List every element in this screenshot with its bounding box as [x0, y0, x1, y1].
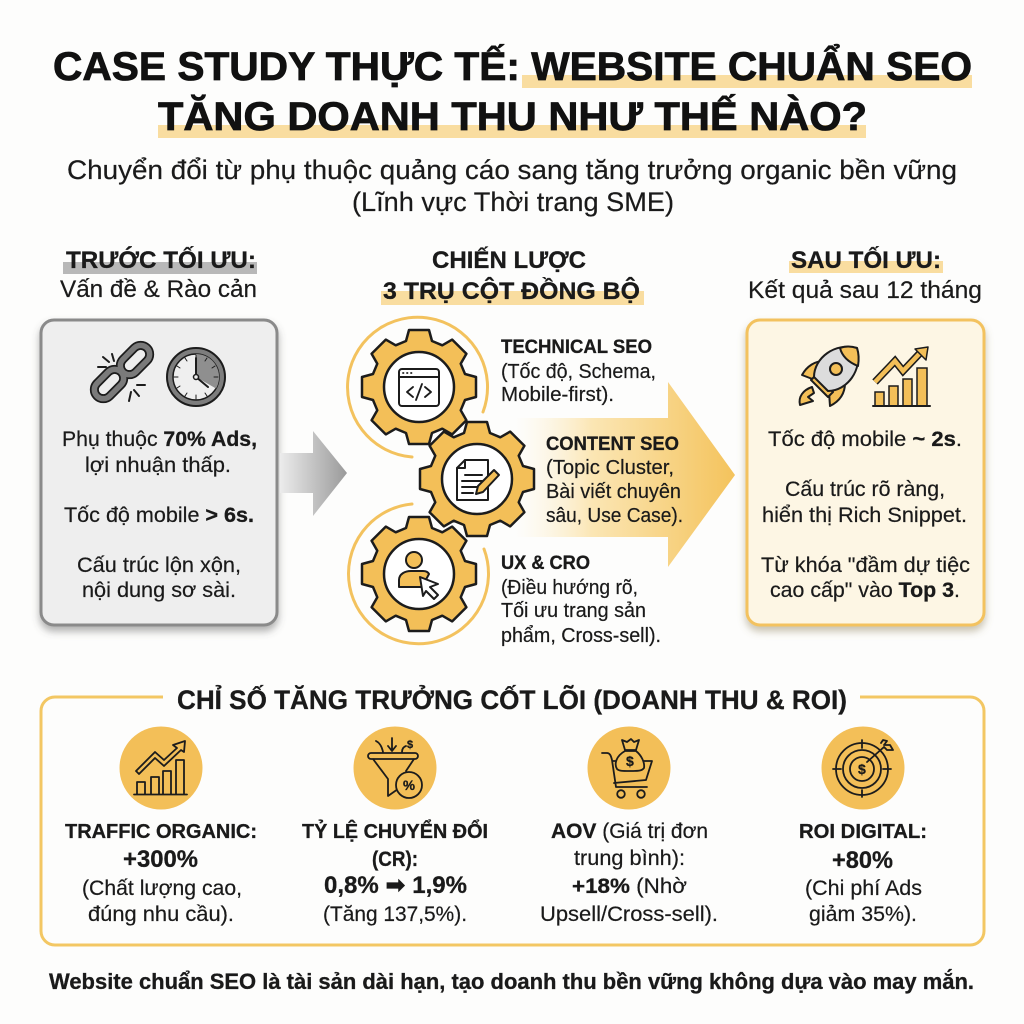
text: content: [546, 434, 683, 527]
text: ux: [501, 553, 661, 647]
before text: nội dung sơ sài.: [82, 579, 236, 602]
icon: funnel: [354, 726, 436, 810]
gear: ux: [362, 517, 476, 631]
ring connector: [348, 317, 489, 644]
text: ux: Tối ưu trang sản: [501, 600, 646, 622]
text: content: Bài viết chuyên: [546, 481, 681, 503]
panel: before: [41, 320, 277, 625]
text: conversion: 0,8% ➡ 1,9%: [324, 872, 467, 899]
icon: target: [822, 726, 904, 810]
text: content: CONTENT SEO: [546, 434, 679, 455]
text: ux: phẩm, Cross-sell).: [501, 625, 661, 647]
metric: traffic organic: [65, 726, 257, 926]
heading: strategy: CHIẾN LƯỢC: [432, 246, 586, 274]
pillar: content seo: [420, 422, 683, 536]
before text: Cấu trúc lộn xộn,: [77, 554, 241, 577]
after text: Tốc độ mobile ~ 2s.: [768, 428, 962, 451]
text: roi: [799, 821, 927, 926]
text: traffic: +300%: [123, 846, 198, 873]
text: conversion: TỶ LỆ CHUYỂN ĐỔI: [302, 819, 488, 843]
text: technical: [501, 337, 656, 406]
icon: funnel: $: [407, 739, 413, 751]
footer statement: Website chuẩn SEO là tài sản dài hạn, tạo doanh thu bền vững không dựa vào may mắn.: [49, 969, 974, 994]
text: traffic: (Chất lượng cao,: [82, 877, 242, 900]
icon: rocket: [800, 346, 859, 406]
text: conversion: [302, 819, 488, 926]
heading: before optimisation: [60, 246, 257, 303]
metric: roi digital: [799, 726, 927, 926]
arrow: grey: [280, 431, 347, 516]
title: TĂNG DOANH THU NHƯ THẾ NÀO?: [158, 93, 867, 139]
text: technical: TECHNICAL SEO: [501, 337, 652, 358]
heading: before optimisation: Vấn đề & Rào cản: [60, 276, 257, 303]
before text: Phụ thuộc 70% Ads,: [62, 428, 257, 451]
text: traffic: TRAFFIC ORGANIC:: [65, 821, 257, 843]
icon: cart with money bag: $: [626, 753, 634, 769]
text: content: sâu, Use Case).: [546, 505, 683, 527]
after text: [761, 428, 970, 602]
text: roi: ROI DIGITAL:: [799, 821, 927, 843]
text: technical: (Tốc độ, Schema,: [501, 361, 656, 383]
subtitle: Chuyển đổi từ phụ thuộc quảng cáo sang tăng trưởng organic bền vững: [67, 155, 957, 185]
text: ux: UX & CRO: [501, 553, 590, 574]
icon: funnel: %: [403, 777, 416, 793]
metric: conversion rate: [302, 726, 488, 926]
text: aov: +18% (Nhờ: [572, 875, 687, 898]
text: roi: +80%: [832, 847, 893, 874]
heading: after optimisation: [748, 246, 982, 304]
heading: before optimisation: TRƯỚC TỐI ƯU:: [66, 246, 256, 274]
gear: content: [420, 422, 534, 536]
after text: Cấu trúc rõ ràng,: [785, 478, 945, 501]
before text: [62, 428, 257, 602]
pillar: ux cro: [362, 517, 661, 647]
icon: clock: [167, 348, 225, 406]
heading: after optimisation: Kết quả sau 12 tháng: [748, 277, 982, 304]
text: aov: AOV (Giá trị đơn: [551, 820, 708, 843]
after text: hiển thị Rich Snippet.: [762, 504, 967, 527]
pillar: technical seo: [362, 330, 656, 444]
icon: target: $: [858, 761, 866, 777]
text: traffic: đúng nhu cầu).: [88, 903, 234, 926]
icon: broken chain: [91, 342, 153, 402]
text: aov: trung bình):: [574, 847, 685, 870]
metric: aov: [540, 726, 718, 926]
text: roi: giảm 35%).: [809, 903, 917, 926]
after text: Từ khóa "đầm dự tiệc: [761, 554, 970, 577]
panel: core metrics: [41, 683, 984, 945]
text: conversion: (CR):: [372, 848, 418, 871]
text: aov: Upsell/Cross-sell).: [540, 903, 718, 926]
gear: technical: [362, 330, 476, 444]
text: conversion: (Tăng 137,5%).: [323, 903, 467, 926]
icon: growth chart: [873, 347, 930, 406]
heading: strategy: [381, 246, 644, 305]
heading: after optimisation: SAU TỐI ƯU:: [791, 246, 941, 274]
text: aov: [540, 820, 718, 926]
text: content: (Topic Cluster,: [546, 457, 674, 479]
icon: cart with money bag: [588, 726, 670, 810]
title: CASE STUDY THỰC TẾ: WEBSITE CHUẨN SEO: [53, 42, 972, 89]
arrow: yellow: [515, 382, 735, 567]
metrics heading: CHỈ SỐ TĂNG TRƯỞNG CỐT LÕI (DOANH THU & ROI): [177, 683, 847, 715]
text: traffic: [65, 821, 257, 926]
text: ux: (Điều hướng rõ,: [501, 577, 638, 599]
subtitle: (Lĩnh vực Thời trang SME): [352, 187, 674, 217]
icon: traffic chart: [120, 726, 202, 810]
heading: strategy: 3 TRỤ CỘT ĐỒNG BỘ: [383, 277, 640, 305]
text: roi: (Chi phí Ads: [805, 877, 922, 900]
subtitle: [67, 155, 957, 217]
text: technical: Mobile-first).: [501, 384, 614, 406]
after text: cao cấp" vào Top 3.: [770, 579, 960, 602]
panel: after: [747, 320, 984, 625]
before text: lợi nhuận thấp.: [85, 454, 231, 477]
title: [53, 42, 972, 139]
before text: Tốc độ mobile > 6s.: [64, 504, 254, 527]
